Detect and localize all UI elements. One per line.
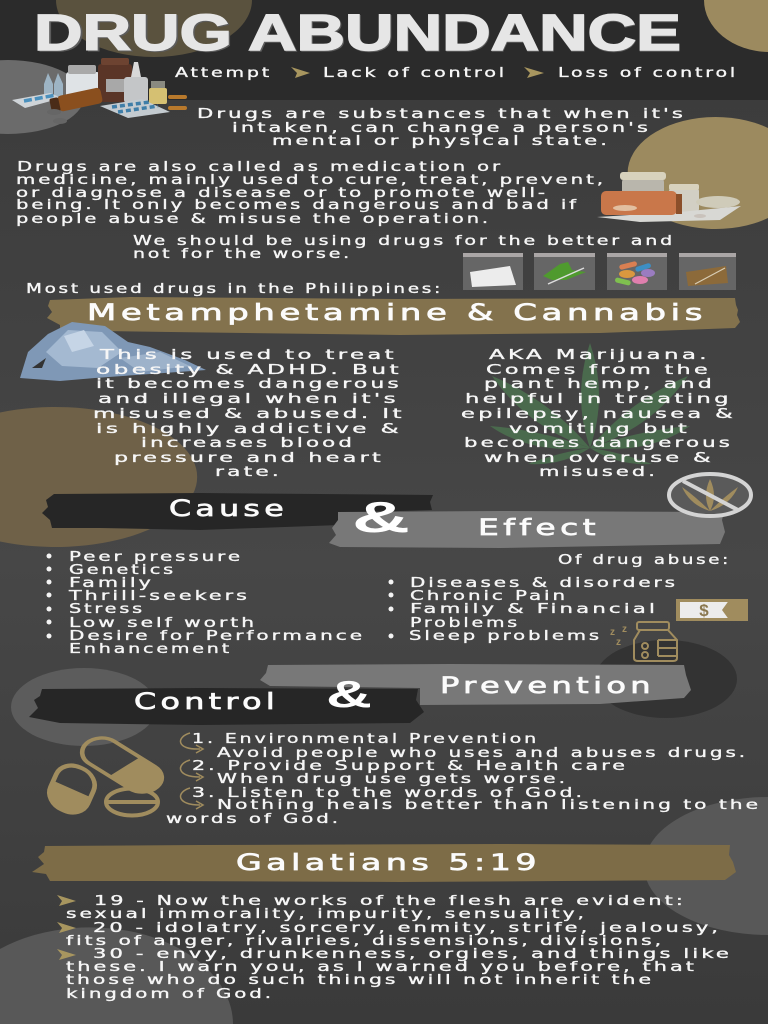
arrow	[57, 922, 76, 933]
banner: cause	[42, 493, 433, 530]
arrow	[57, 895, 76, 906]
list: causes: Family	[69, 575, 154, 591]
list: control and prevention: When drug use gets worse.	[217, 771, 568, 787]
banner: metamphetamine and cannabis: Metamphetamine & Cannabis	[87, 301, 707, 326]
medication paragraph: Drugs are also called as medication or	[17, 159, 503, 175]
list: control and prevention: 3. Listen to the words of God.	[192, 785, 585, 801]
text: metamphetamine: increases blood	[141, 435, 355, 451]
statement: We should be using drugs for the better and	[133, 233, 675, 249]
icon: drug bags	[463, 253, 736, 290]
text: cannabis: helpful in treating	[465, 391, 732, 407]
arrow	[291, 67, 310, 78]
icon: medicine collection	[12, 58, 187, 124]
verses: kingdom of God.	[66, 986, 274, 1002]
icon: sleeping pills bottle	[610, 622, 677, 661]
verses: those who do such things will not inherit the	[66, 972, 654, 988]
verses: these. I warn you, as I warned you before, that	[66, 959, 697, 975]
verses: 19 - Now the works of the flesh are evident:	[94, 893, 686, 909]
icon: sleeping pills bottle: z	[610, 627, 615, 638]
text: cannabis: vomiting but	[509, 421, 690, 437]
icon: money: $	[699, 601, 709, 620]
list: causes	[46, 549, 365, 657]
header band	[0, 0, 768, 100]
medication paragraph: or diagnose a disease or to promote well-	[16, 185, 548, 201]
list: control and prevention: Nothing heals better than listening to the	[217, 797, 761, 813]
icon: money	[676, 599, 748, 621]
verses: fits of anger, rivalries, dissensions, divisions,	[66, 933, 664, 949]
banner: prevention: Prevention	[440, 674, 655, 699]
text: metamphetamine: and illegal when it's	[98, 391, 399, 407]
text: metamphetamine: rate.	[215, 464, 282, 480]
icon: pills	[44, 732, 170, 818]
ampersand: &	[352, 493, 410, 542]
list: causes: Stress	[69, 601, 145, 617]
list: causes: Genetics	[69, 562, 176, 578]
list: control and prevention: Avoid people who uses and abuses drugs.	[217, 745, 748, 761]
ampersand: &	[326, 674, 372, 716]
text: metamphetamine: obesity & ADHD. But	[96, 362, 402, 378]
text: metamphetamine: it becomes dangerous	[96, 376, 402, 392]
arrow	[524, 67, 544, 78]
text: cannabis: when overuse &	[484, 450, 714, 466]
banner: control	[29, 688, 424, 725]
statement: not for the worse.	[133, 246, 352, 262]
image: cannabis leaf	[490, 343, 690, 464]
list: effects: Diseases & disorders	[410, 575, 678, 591]
bag: brown brick	[679, 253, 736, 290]
banner: prevention	[260, 664, 691, 705]
bag: green leaf	[534, 253, 595, 290]
text: metamphetamine	[93, 347, 405, 480]
list: causes: Peer pressure	[69, 549, 243, 565]
medication paragraph: being. It only becomes dangerous and bad if	[16, 197, 579, 213]
medication paragraph: medicine, mainly used to cure, treat, prevent,	[16, 172, 606, 188]
definition text: mental or physical state.	[272, 133, 610, 149]
definition text	[197, 106, 686, 149]
text: cannabis: AKA Marijuana.	[489, 347, 710, 363]
flow: attempt to loss of control: Loss of control	[558, 65, 738, 81]
text: metamphetamine: This is used to treat	[98, 347, 397, 363]
statement	[133, 233, 675, 262]
list: effects	[388, 575, 678, 644]
text: cannabis: becomes dangerous	[464, 435, 733, 451]
text: cannabis: epilepsy, nausea &	[461, 406, 736, 422]
list: causes: Low self worth	[69, 615, 257, 631]
icon: spilled pill bottle	[597, 172, 741, 222]
verses: 30 - envy, drunkenness, orgies, and things like	[93, 946, 732, 962]
bag: white powder	[463, 253, 523, 290]
text: cannabis	[461, 347, 736, 480]
verses: 20 - idolatry, sorcery, enmity, strife, jealousy,	[93, 920, 721, 936]
list: effects: Chronic Pain	[410, 588, 568, 604]
list: effects: Problems	[410, 615, 520, 631]
text: metamphetamine: is highly addictive &	[96, 421, 402, 437]
image: meth crystals	[20, 322, 206, 381]
bag: colored pills	[607, 253, 667, 290]
verses: sexual immorality, impurity, sensuality,	[66, 906, 587, 922]
text: cannabis: Comes from the	[486, 362, 711, 378]
label: of drug abuse: Of drug abuse:	[558, 552, 731, 568]
banner: effect	[329, 511, 725, 548]
list: causes: Desire for Performance	[69, 628, 365, 644]
medication paragraph	[16, 159, 606, 227]
list: effects: Sleep problems	[409, 628, 602, 644]
text: cannabis: plant hemp, and	[484, 376, 715, 392]
list: effects: Family & Financial	[410, 601, 658, 617]
banner: galatians: Galatians 5:19	[236, 851, 541, 876]
text: metamphetamine: pressure and heart	[114, 450, 384, 466]
icon: curved arrows	[181, 733, 203, 809]
definition text: intaken, can change a person's	[232, 120, 651, 136]
definition text: Drugs are substances that when it's	[197, 106, 686, 122]
icon: no cannabis sign	[669, 474, 751, 516]
title: DRUG ABUNDANCE	[34, 4, 681, 61]
most used label: Most used drugs in the Philippines:	[26, 281, 443, 297]
list: control and prevention	[166, 731, 761, 827]
icon: sleeping pills bottle: z	[616, 637, 621, 648]
banner: control: Control	[134, 690, 279, 715]
list: control and prevention: 2. Provide Support & Health care	[192, 758, 628, 774]
banner: galatians	[32, 844, 736, 882]
flow: attempt to loss of control: Lack of control	[323, 65, 507, 81]
title: DRUG ABUNDANCE	[36, 5, 681, 62]
list: causes: Enhancement	[69, 641, 232, 657]
verses	[57, 893, 732, 1002]
flow: attempt to loss of control: Attempt	[175, 65, 272, 81]
list: control and prevention: 1. Environmental Prevention	[192, 731, 539, 747]
text: metamphetamine: misused & abused. It	[93, 406, 405, 422]
banner: cause: Cause	[169, 497, 288, 522]
medication paragraph: people abuse & misuse the operation.	[16, 211, 491, 227]
banner: effect: Effect	[478, 516, 600, 541]
flow: attempt to loss of control	[175, 65, 738, 81]
icon: sleeping pills bottle: z	[622, 624, 627, 635]
arrow	[57, 949, 76, 960]
list: control and prevention: words of God.	[166, 811, 341, 827]
list: causes: Thrill-seekers	[67, 588, 250, 604]
banner: metamphetamine and cannabis	[47, 297, 740, 335]
text: cannabis: misused.	[539, 464, 658, 480]
